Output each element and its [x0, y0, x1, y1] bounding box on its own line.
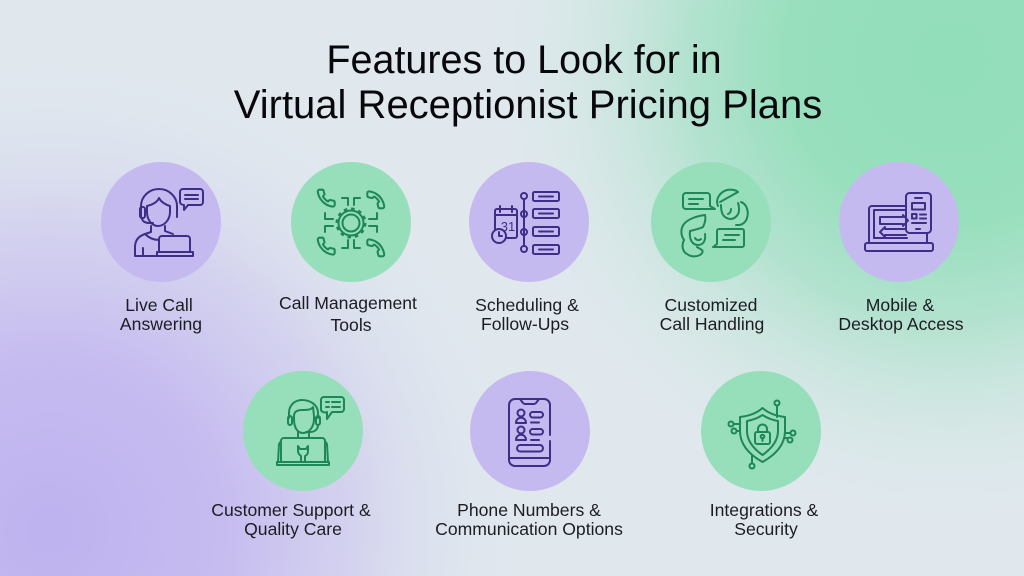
label: Scheduling &	[475, 295, 579, 315]
label: Security	[734, 519, 798, 539]
feature: Live Call Answering	[101, 162, 221, 334]
label: Answering	[120, 314, 202, 334]
label: Customized	[665, 295, 757, 315]
icon: support agent with wrench on laptop	[277, 397, 344, 465]
label	[660, 295, 764, 334]
feature: Customized Call Handling	[651, 162, 771, 334]
feature: Scheduling & Follow-Ups	[469, 162, 589, 334]
circle: Phone Numbers & Communication Options	[470, 371, 590, 491]
title	[234, 38, 822, 127]
feature: Call Management Tools	[279, 162, 417, 335]
label	[710, 500, 819, 539]
feature: Mobile & Desktop Access	[838, 162, 964, 334]
label	[120, 295, 202, 334]
label	[435, 500, 623, 539]
label: Live Call	[125, 295, 193, 315]
title: Features to Look for in	[326, 38, 722, 82]
circle: Call Management Tools	[291, 162, 411, 282]
label: Phone Numbers &	[457, 500, 601, 520]
calendar date: 31	[501, 219, 515, 234]
circle: Customized Call Handling	[651, 162, 771, 282]
label: Integrations &	[710, 500, 819, 520]
circle: Customer Support & Quality Care	[243, 371, 363, 491]
icon: gear with four phones	[318, 190, 384, 256]
icon: two callers with speech bubbles	[681, 190, 748, 256]
circle: Live Call Answering	[101, 162, 221, 282]
label: Desktop Access	[838, 314, 964, 334]
circle: Integrations & Security	[701, 371, 821, 491]
label: Communication Options	[435, 519, 623, 539]
icon: agent with headset and speech bubble	[135, 189, 203, 256]
label: Quality Care	[244, 519, 342, 539]
icon: laptop and phone	[865, 193, 933, 251]
label	[838, 295, 964, 334]
circle: Scheduling & Follow-Ups	[469, 162, 589, 282]
circle: Mobile & Desktop Access	[839, 162, 959, 282]
label: Customer Support &	[211, 500, 371, 520]
label: Call Handling	[660, 314, 764, 334]
label: Follow-Ups	[481, 314, 569, 334]
label	[211, 500, 371, 539]
feature: Integrations & Security	[701, 371, 821, 539]
label: Call Management	[279, 293, 417, 313]
label	[279, 293, 417, 335]
feature: Customer Support & Quality Care	[211, 371, 371, 539]
label	[475, 295, 579, 334]
feature: Phone Numbers & Communication Options	[435, 371, 623, 539]
icon: smartphone with contact list	[509, 399, 550, 466]
label: Mobile &	[866, 295, 934, 315]
title: Virtual Receptionist Pricing Plans	[234, 83, 822, 127]
icon: shield with padlock and circuit nodes	[728, 400, 796, 468]
label: Tools	[330, 315, 372, 335]
icon: calendar and timeline	[492, 192, 559, 254]
